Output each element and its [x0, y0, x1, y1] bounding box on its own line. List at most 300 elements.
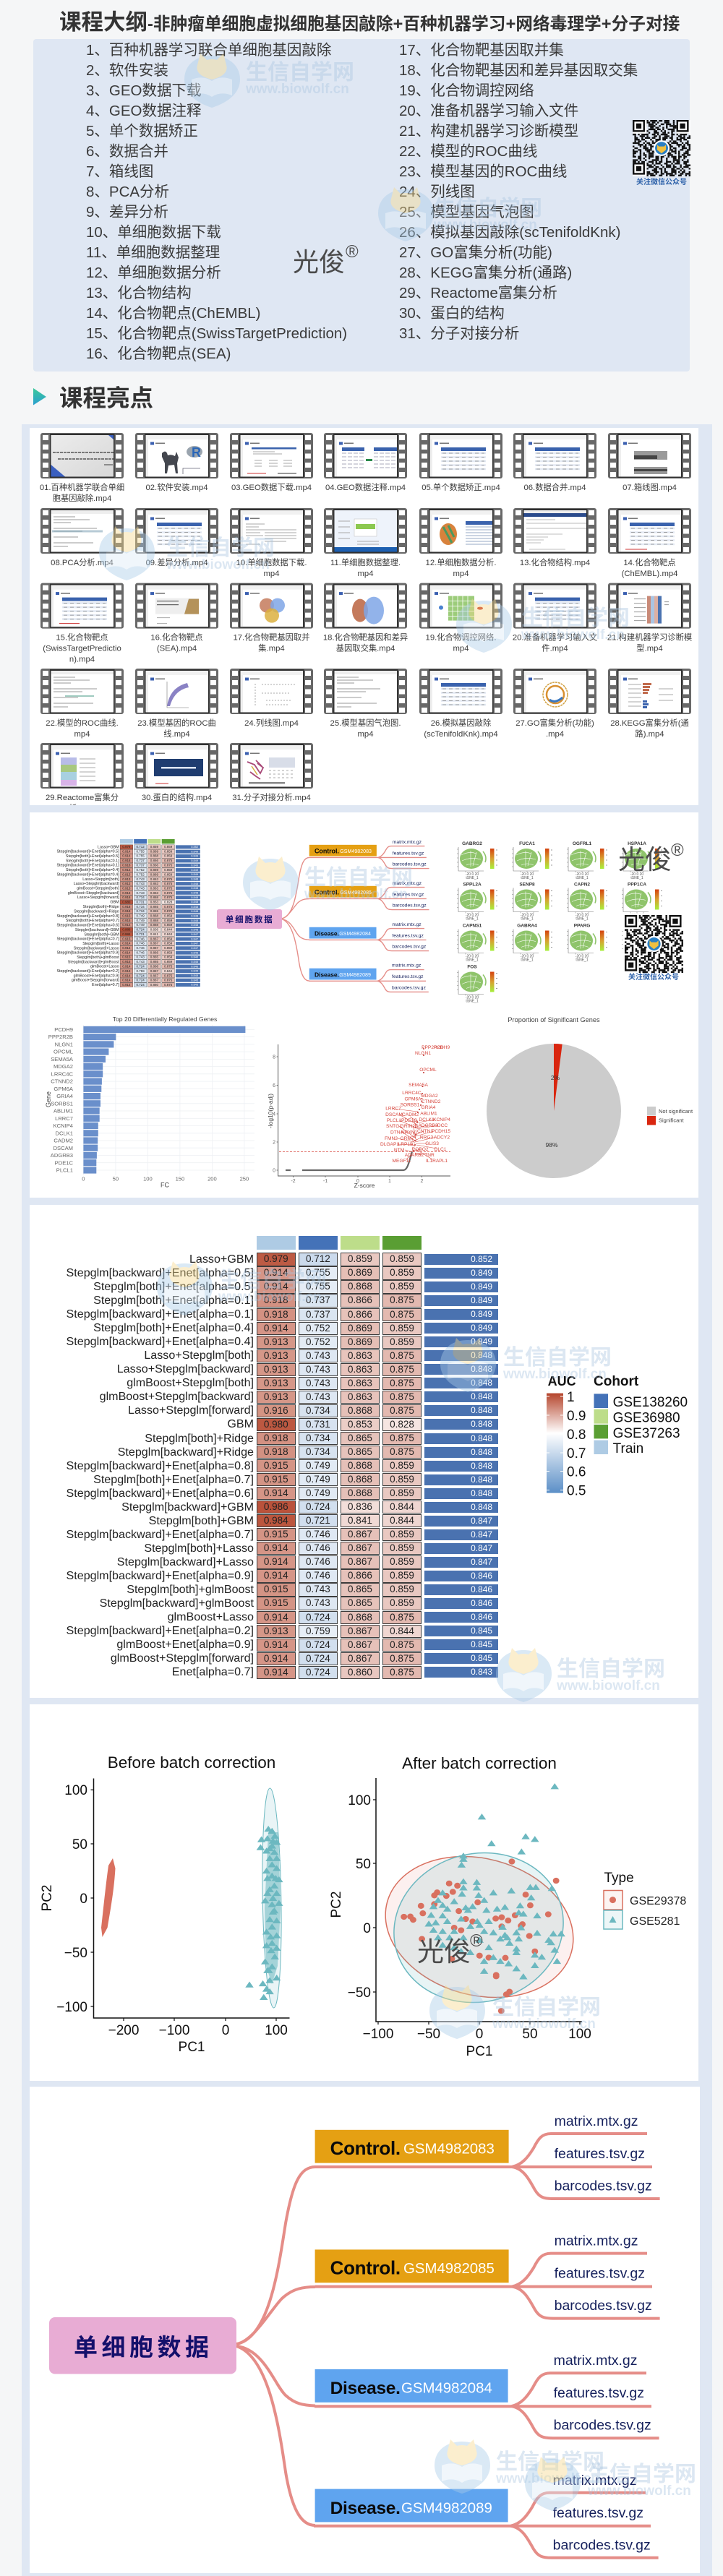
chart: before batch correction: PC1: [179, 2040, 205, 2055]
main heatmap: 0.749: [306, 1487, 330, 1498]
tSNE SENP8: [512, 882, 552, 921]
panel: course outline: [33, 39, 690, 372]
tSNE GABRA4: tSNE_1: [521, 958, 534, 963]
chart: before batch correction: −100: [56, 2000, 87, 2015]
chart: volcano plot: 2: [421, 1179, 424, 1184]
main heatmap: 0.721: [306, 1515, 330, 1526]
watermark 9: 生信自学网: [492, 1996, 601, 2019]
chart: volcano plot: IL1RAPL1: [426, 1159, 448, 1164]
video 12: 12.单细胞数据分析.: [426, 557, 496, 567]
small heatmap: 0.749: [136, 919, 145, 922]
small mind map: Control.: [315, 848, 339, 855]
small heatmap: 0.853: [150, 900, 158, 903]
main heatmap: 0.866: [348, 1295, 372, 1305]
main heatmap: 0.860: [348, 1667, 372, 1678]
outline list: right column: 19、化合物调控网络: [399, 82, 534, 99]
chart: volcano plot: LRP1B: [398, 1142, 414, 1147]
PCA legend: GSE5281: [630, 1915, 680, 1928]
chart: top 20 genes bar chart: 0: [82, 1175, 85, 1182]
chart: volcano plot: TNR: [424, 1153, 435, 1158]
branch: Disease GSM4982084: features.tsv.gz: [554, 2385, 644, 2401]
main heatmap: 0.743: [306, 1584, 330, 1594]
small heatmap: 0.867: [150, 969, 158, 973]
small heatmap: 0.724: [136, 983, 145, 987]
chart: before batch correction: 50: [72, 1837, 87, 1852]
tSNE GABRG2: [457, 841, 497, 880]
branch: Control GSM4982085: barcodes.tsv.gz: [555, 2298, 652, 2314]
small mind map: GSM4982085: [340, 890, 372, 896]
tSNE OGFRL1: OGFRL1: [573, 841, 592, 846]
main heatmap: 0.914: [264, 1542, 288, 1553]
main heatmap: 0.875: [390, 1308, 414, 1320]
chart: top 20 genes bar chart: PPP2R2B: [48, 1034, 73, 1040]
chart: before batch correction: 100: [64, 1783, 87, 1798]
brand mark top: [293, 242, 359, 277]
main heatmap: 0.734: [306, 1405, 330, 1416]
small heatmap: 0.859: [150, 845, 158, 849]
main heatmap: 0.712: [306, 1253, 330, 1264]
chart: volcano plot: -2: [291, 1179, 296, 1184]
main heatmap: 0.865: [348, 1433, 372, 1443]
branch: Control GSM4982085: [315, 2233, 660, 2319]
small heatmap: 0.749: [136, 923, 145, 927]
small heatmap: 0.844: [164, 969, 172, 973]
chart: top 20 genes bar chart: LRRC4C: [51, 1070, 74, 1077]
branch: Disease GSM4982084: matrix.mtx.gz: [554, 2353, 638, 2369]
small heatmap: 0.848: [191, 891, 198, 895]
video 18: [323, 583, 408, 653]
video 12: [419, 508, 502, 578]
branch: Control GSM4982083: [315, 2113, 660, 2199]
heatmap legend: 1: [567, 1390, 575, 1405]
watermark 5: www.biowolf.cn: [304, 887, 408, 902]
main heatmap: 0.875: [390, 1378, 414, 1388]
small heatmap: 0.845: [191, 979, 198, 982]
tSNE SENP8: tSNE_1: [521, 916, 534, 921]
heatmap legend: [547, 1374, 688, 1499]
watermark 1: www.biowolf.cn: [245, 82, 349, 97]
chart: volcano plot: GRIN2B: [401, 1124, 419, 1129]
small heatmap: 0.848: [191, 909, 198, 913]
small heatmap: 0.875: [164, 891, 172, 895]
chart: after batch correction: −100: [363, 2027, 393, 2042]
chart: top 20 genes bar chart: 150: [176, 1175, 184, 1182]
video 11: mp4: [358, 570, 373, 578]
main heatmap: 0.875: [390, 1391, 414, 1402]
small heatmap: Stepglm[backward]+Enet[alpha=0.1]: [56, 863, 119, 867]
tSNE FOS: tSNE_1: [466, 999, 479, 1003]
video 13: [513, 508, 596, 567]
main heatmap: 0.869: [348, 1336, 372, 1347]
main heatmap: 0.724: [306, 1612, 330, 1623]
main heatmap: 0.875: [390, 1446, 414, 1457]
small heatmap: 0.914: [122, 849, 130, 853]
main heatmap: Stepglm[backward]+Enet[alpha=0.7]: [67, 1528, 254, 1541]
video 31: [230, 743, 313, 802]
video 07: [608, 433, 691, 492]
watermark 8: [496, 1648, 665, 1702]
small heatmap: 0.848: [191, 882, 198, 885]
main heatmap: 0.746: [306, 1570, 330, 1581]
outline list: left column: 14、化合物靶点(ChEMBL): [86, 305, 260, 321]
small heatmap: 0.868: [150, 923, 158, 927]
small mind map: features.tsv.gz: [392, 974, 424, 979]
small heatmap: 0.847: [191, 946, 198, 950]
video 28: [608, 669, 691, 739]
video 22: [40, 669, 124, 739]
chart: top 20 genes bar chart: ADGRB3: [51, 1152, 73, 1159]
small heatmap: 0.859: [164, 868, 172, 872]
video 14: [608, 508, 691, 578]
PCA legend: [604, 1871, 686, 1929]
chart: volcano plot: NTM: [394, 1148, 404, 1153]
small heatmap: 0.755: [136, 849, 145, 853]
video 16: 16.化合物靶点: [150, 632, 203, 643]
main heatmap: 0.866: [348, 1570, 372, 1581]
main heatmap: Enet[alpha=0.7]: [172, 1665, 254, 1678]
chart: after batch correction: PC2: [329, 1892, 344, 1918]
small heatmap: 0.843: [191, 983, 198, 987]
small heatmap: 0.863: [150, 882, 158, 885]
outline list: left column: 8、PCA分析: [86, 184, 169, 199]
main heatmap: 0.849: [471, 1268, 492, 1278]
branch: Disease GSM4982089: Disease.: [330, 2499, 401, 2518]
small heatmap: glmBoost+Stepglm[backward]: [68, 890, 119, 895]
small heatmap: 0.724: [136, 974, 145, 977]
chart: top 20 genes bar chart: MDGA2: [54, 1063, 73, 1070]
video 02: 02.软件安装.mp4: [145, 482, 208, 492]
video 25: [324, 669, 407, 739]
main heatmap: 0.849: [471, 1336, 492, 1347]
tSNE CAPNS1: -20 0 20: [466, 954, 479, 958]
chart: before batch correction: Before batch correction: [108, 1753, 275, 1772]
chart: volcano plot: NRG3: [420, 1135, 433, 1141]
small heatmap: 0.743: [136, 956, 145, 959]
main heatmap: 0.852: [471, 1254, 492, 1264]
small heatmap: 0.914: [122, 979, 130, 982]
video 08: [40, 508, 124, 567]
branch: Control GSM4982083: GSM4982083: [403, 2141, 495, 2157]
main heatmap: 0.847: [471, 1557, 492, 1567]
small heatmap: 0.866: [150, 859, 158, 862]
main heatmap: 0.847: [471, 1543, 492, 1553]
branch: Control GSM4982085: features.tsv.gz: [555, 2266, 645, 2282]
main heatmap: 0.875: [390, 1405, 414, 1416]
chart: top 20 genes bar chart: CADM2: [54, 1138, 73, 1144]
branch: Disease GSM4982084: GSM4982084: [401, 2381, 492, 2397]
main heatmap: 0.755: [306, 1267, 330, 1278]
small heatmap: 0.918: [122, 859, 130, 862]
main heatmap: 0.875: [390, 1653, 414, 1664]
small heatmap: 0.746: [136, 950, 145, 954]
main heatmap: 0.849: [471, 1323, 492, 1333]
main heatmap: 0.759: [306, 1626, 330, 1636]
video 09: [135, 508, 218, 567]
main heatmap: 0.913: [264, 1378, 288, 1388]
video 03: 03.GEO数据下载.mp4: [231, 482, 312, 492]
chart: after batch correction: −50: [417, 2027, 440, 2042]
main heatmap: 0.859: [390, 1570, 414, 1581]
small mind map: GSM4982089: [339, 973, 371, 978]
small heatmap: 0.914: [122, 923, 130, 927]
watermark 7: www.biowolf.cn: [502, 1367, 607, 1382]
tSNE CAPN2: -20 0 20: [576, 914, 589, 918]
small heatmap: 0.913: [122, 886, 130, 890]
small mind map: features.tsv.gz: [393, 892, 424, 897]
main heatmap: 0.743: [306, 1597, 330, 1608]
main heatmap: Stepglm[both]+Enet[alpha=0.1]: [93, 1294, 254, 1307]
branch: Disease GSM4982089: barcodes.tsv.gz: [553, 2537, 651, 2553]
main heatmap: glmBoost+Stepglm[forward]: [111, 1652, 254, 1665]
small heatmap: 0.737: [136, 859, 145, 862]
heatmap legend: 0.7: [567, 1446, 586, 1461]
video 18: 基因取交集.mp4: [336, 643, 395, 653]
video 21: 型.mp4: [636, 643, 663, 653]
main heatmap: Stepglm[both]+Enet[alpha=0.5]: [93, 1280, 254, 1293]
small heatmap: Stepglm[both]+Enet[alpha=0.4]: [66, 867, 119, 872]
main heatmap: Stepglm[both]+Enet[alpha=0.7]: [93, 1473, 254, 1486]
outline list: left column: 9、差异分析: [86, 204, 168, 220]
tSNE GABRA4: [512, 924, 552, 963]
main heatmap: Lasso+Stepglm[backward]: [117, 1362, 254, 1375]
chart: volcano plot: ADGRB3: [418, 1123, 438, 1128]
main heatmap: 0.868: [348, 1474, 372, 1485]
chart: top 20 genes bar chart: PDE1C: [55, 1159, 74, 1166]
watermark 3: www.biowolf.cn: [166, 557, 270, 572]
small heatmap: 0.859: [164, 946, 172, 950]
chart: volcano plot: ROBO2: [411, 1147, 429, 1152]
small heatmap: 0.859: [164, 950, 172, 954]
chart: volcano plot: 0: [356, 1179, 359, 1184]
small heatmap: 0.724: [136, 928, 145, 932]
video 29: [40, 743, 124, 805]
icon: QR code top: [633, 120, 690, 176]
chart: volcano plot: LRRC7: [385, 1107, 401, 1112]
main heatmap: 0.846: [471, 1584, 492, 1594]
chart: volcano plot: DCLK1: [419, 1117, 435, 1122]
chart: volcano plot: LRRC4C: [402, 1091, 422, 1096]
chart: after batch correction: 100: [348, 1793, 371, 1808]
main heatmap: 0.749: [306, 1460, 330, 1471]
video 17: 17.化合物靶基因取并: [233, 632, 310, 643]
video 16: (SEA).mp4: [157, 645, 197, 653]
main heatmap: 0.868: [348, 1281, 372, 1292]
main heatmap: 0.859: [390, 1336, 414, 1347]
small heatmap: 0.875: [164, 859, 172, 862]
heatmap legend: 0.9: [567, 1409, 586, 1424]
video 25: mp4: [358, 730, 373, 739]
brand mark top: ®: [346, 242, 359, 262]
small heatmap: 0.859: [164, 849, 172, 853]
tSNE CAPNS1: CAPNS1: [463, 924, 482, 928]
tSNE CAPNS1: [457, 924, 497, 963]
main heatmap: glmBoost+Stepglm[both]: [127, 1376, 254, 1389]
chart: volcano plot: 4: [273, 1112, 275, 1117]
video 24: 24.列线图.mp4: [244, 718, 299, 728]
chart: pie significant genes: [487, 1016, 693, 1178]
small heatmap: 0.743: [136, 877, 145, 881]
video 06: 06.数据合并.mp4: [523, 482, 586, 492]
outline list: right column: 29、Reactome富集分析: [399, 285, 557, 301]
small heatmap: 0.743: [136, 891, 145, 895]
watermark 5: [243, 856, 413, 911]
main heatmap: 0.867: [348, 1556, 372, 1567]
tSNE SPPL2A: -20 0 20: [466, 914, 479, 918]
heatmap legend: GSE36980: [613, 1411, 680, 1425]
main heatmap: 0.859: [390, 1253, 414, 1264]
branch: Control GSM4982083: Control.: [330, 2137, 401, 2159]
small heatmap: 0.859: [164, 919, 172, 922]
main heatmap: 0.915: [264, 1597, 288, 1608]
chart: volcano plot: CTNND2: [422, 1099, 441, 1104]
chart: volcano plot: [267, 1044, 450, 1189]
main heatmap: Stepglm[both]+Ridge: [145, 1432, 254, 1445]
watermark 10: www.biowolf.cn: [495, 2471, 599, 2486]
brand mark PCA: 光俊: [417, 1937, 471, 1967]
small heatmap: 0.746: [136, 946, 145, 950]
chart: volcano plot: ADARB2: [405, 1153, 424, 1158]
small heatmap: 0.724: [136, 979, 145, 982]
video 27: [513, 669, 596, 739]
small heatmap: 0.859: [164, 960, 172, 963]
outline list: left column: 11、单细胞数据整理: [86, 244, 220, 260]
small heatmap: 0.875: [164, 896, 172, 899]
small heatmap: 0.875: [164, 974, 172, 977]
main heatmap: 0.849: [471, 1309, 492, 1319]
small heatmap: Stepglm[backward]+Enet[alpha=0.4]: [56, 872, 119, 877]
small heatmap: 0.734: [136, 909, 145, 913]
small heatmap: 0.913: [122, 969, 130, 973]
chart: top 20 genes bar chart: DCLK1: [56, 1130, 73, 1136]
chart: volcano plot: MDGA2: [421, 1094, 438, 1099]
chart: volcano plot: 6: [273, 1083, 275, 1089]
video 01: 胞基因敲除.mp4: [53, 493, 111, 503]
main heatmap: 0.916: [264, 1405, 288, 1416]
main heatmap: 0.918: [264, 1295, 288, 1305]
tSNE FOS: [457, 964, 497, 1003]
video 23: [135, 669, 218, 739]
small heatmap: 0.755: [136, 854, 145, 858]
heatmap legend: GSE37263: [613, 1426, 680, 1441]
main heatmap: 0.914: [264, 1667, 288, 1678]
main heatmap: 0.848: [471, 1378, 492, 1388]
chart: after batch correction: 50: [356, 1857, 371, 1872]
main heatmap: 0.859: [390, 1597, 414, 1608]
main heatmap: 0.859: [390, 1529, 414, 1540]
chart: volcano plot: -1: [323, 1179, 328, 1184]
main heatmap: 0.844: [390, 1501, 414, 1512]
video 20: 件.mp4: [542, 643, 568, 653]
chart: before batch correction: −50: [64, 1946, 87, 1961]
small heatmap: 0.913: [122, 891, 130, 895]
chart: top 20 genes bar chart: SORBS1: [51, 1100, 73, 1107]
small heatmap: 0.865: [150, 909, 158, 913]
main heatmap: 0.841: [348, 1515, 372, 1526]
chart: top 20 genes bar chart: SEMA5A: [51, 1056, 74, 1062]
branch: Control GSM4982085: Control.: [330, 2257, 401, 2279]
outline list: right column: [399, 42, 638, 342]
video 17: [230, 583, 313, 653]
main heatmap: Stepglm[backward]+Enet[alpha=0.8]: [67, 1459, 254, 1472]
outline list: left column: 13、化合物结构: [86, 285, 192, 301]
main heatmap: 0.867: [348, 1626, 372, 1636]
small heatmap: 0.866: [150, 950, 158, 954]
chart: volcano plot: SNTG1: [386, 1124, 402, 1129]
main heatmap: [67, 1236, 498, 1679]
small heatmap: 0.865: [150, 956, 158, 959]
outline list: right column: 18、化合物靶基因和差异基因取交集: [399, 62, 638, 79]
tSNE PPARG: -20 0 20: [576, 954, 589, 958]
outline list: right column: 21、构建机器学习诊断模型: [399, 123, 578, 139]
outline list: right column: 20、准备机器学习输入文件: [399, 103, 578, 119]
tSNE CAPN2: tSNE_1: [576, 916, 589, 921]
video 05: 05.单个数据矫正.mp4: [422, 482, 500, 492]
video 05: [419, 433, 502, 492]
watermark 2: 生信自学网: [434, 197, 542, 220]
small heatmap: 0.860: [150, 983, 158, 987]
branch: Control GSM4982083: matrix.mtx.gz: [555, 2113, 638, 2129]
small heatmap: glmBoost+Enet[alpha=0.9]: [74, 974, 119, 978]
main heatmap: 0.918: [264, 1433, 288, 1443]
main heatmap: Lasso+Stepglm[forward]: [128, 1404, 254, 1417]
branch: Disease GSM4982089: GSM4982089: [401, 2500, 492, 2516]
video 15: n).mp4: [69, 656, 95, 664]
small heatmap: 0.875: [164, 979, 172, 982]
brand mark middle: 光俊: [618, 845, 672, 875]
video 03: [230, 433, 313, 492]
small mind map: barcodes.tsv.gz: [393, 903, 427, 909]
watermark 9: www.biowolf.cn: [492, 2017, 596, 2032]
main heatmap: 0.875: [390, 1667, 414, 1678]
main heatmap: Stepglm[both]+Enet[alpha=0.4]: [93, 1321, 254, 1334]
watermark 7: [440, 1338, 612, 1392]
small heatmap: 0.743: [136, 886, 145, 890]
root node: [49, 2317, 236, 2374]
main heatmap: 0.731: [306, 1419, 330, 1430]
small heatmap: 0.845: [191, 969, 198, 973]
root node: 单细胞数据: [74, 2334, 213, 2361]
small mind map: barcodes.tsv.gz: [393, 862, 427, 867]
chart: volcano plot: GRM7: [400, 1136, 414, 1141]
small heatmap: 0.875: [164, 965, 172, 969]
branch: Disease GSM4982084: Disease.: [330, 2379, 401, 2398]
video 30: [135, 743, 218, 802]
main heatmap: 0.724: [306, 1667, 330, 1678]
small heatmap: 0.859: [164, 937, 172, 940]
main heatmap: 0.875: [390, 1350, 414, 1361]
watermark 2: [378, 187, 542, 241]
outline list: right column: 22、模型的ROC曲线: [399, 143, 537, 160]
main heatmap: 0.863: [348, 1378, 372, 1388]
chart: volcano plot: PDE1C: [401, 1118, 417, 1123]
small heatmap: 0.868: [150, 914, 158, 918]
outline list: left column: 12、单细胞数据分析: [86, 265, 221, 280]
main heatmap: 0.915: [264, 1529, 288, 1540]
chart: pie significant genes: 2%: [551, 1074, 560, 1081]
main heatmap: 0.875: [390, 1364, 414, 1375]
chart: top 20 genes bar chart: LRRC7: [55, 1115, 73, 1122]
video 12: mp4: [453, 570, 469, 578]
main heatmap: 0.743: [306, 1391, 330, 1402]
main heatmap: 0.865: [348, 1446, 372, 1457]
main heatmap: 0.859: [390, 1584, 414, 1594]
small heatmap: 0.848: [191, 928, 198, 932]
watermark 8: 生信自学网: [557, 1657, 665, 1681]
video 26: 26.模拟基因敲除: [431, 718, 491, 728]
main heatmap: Stepglm[backward]+Enet[alpha=0.6]: [67, 1487, 254, 1500]
small heatmap: 0.844: [164, 932, 172, 936]
main heatmap: Stepglm[backward]+Lasso: [117, 1555, 254, 1568]
